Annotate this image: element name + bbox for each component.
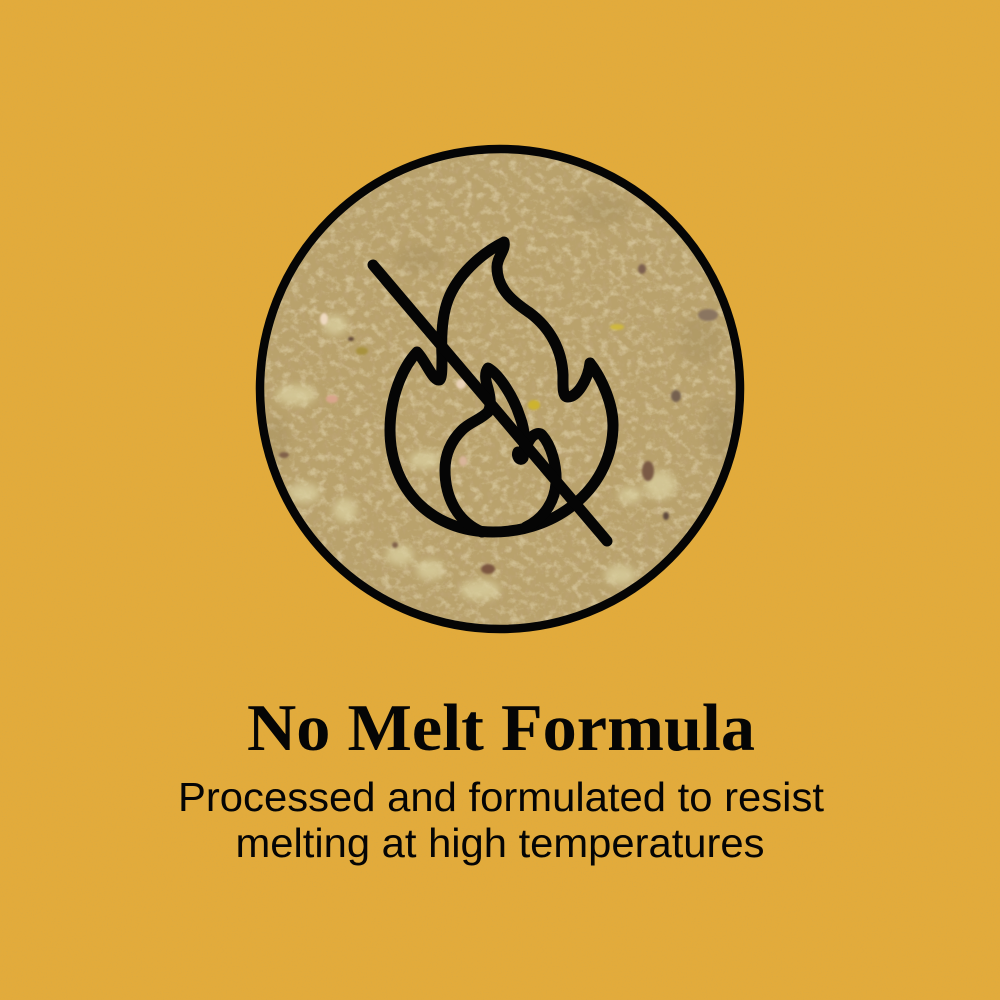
slash across flame: [373, 265, 607, 541]
description line 1: Processed and formulated to resist: [178, 774, 825, 820]
flame inner outline: [445, 412, 488, 532]
black ring: [260, 149, 740, 629]
grain texture disc: [255, 145, 745, 635]
description text: [178, 774, 825, 866]
icon: crossed-out flame: [373, 242, 613, 541]
title: No Melt Formula: [247, 691, 755, 765]
description line 2: melting at high temperatures: [236, 820, 764, 866]
flame inner tip and right lobe: [486, 368, 556, 527]
flame outer outline: [390, 242, 613, 532]
badge: textured circle with black ring: [255, 145, 745, 635]
